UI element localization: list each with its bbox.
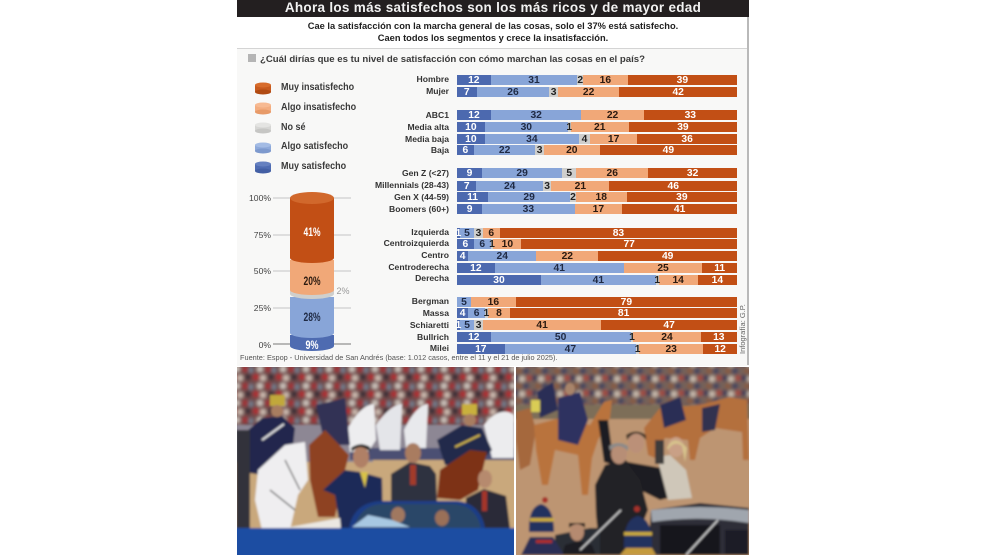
- bar: Mujer: [457, 87, 737, 98]
- bar: Izquierda: 3: [476, 228, 481, 239]
- bar: Mujer: 7: [464, 87, 470, 98]
- bar: ABC1: 32: [530, 110, 542, 121]
- bar: Mujer: 3: [551, 87, 556, 98]
- bar: ABC1: [457, 110, 737, 121]
- bar: Massa: 1: [484, 308, 489, 319]
- bar: Mujer: 26: [507, 87, 519, 98]
- bar: Centro: [457, 251, 737, 262]
- stacked cylinder chart: 2%: [336, 286, 350, 296]
- bar: Boomers: 41: [674, 204, 685, 215]
- stacked cylinder chart: 9%: [306, 338, 319, 352]
- bar: Baja: 22: [499, 145, 510, 156]
- bar: Hombre: 12: [468, 75, 480, 86]
- bar: Derecha: 14: [712, 275, 723, 286]
- bar: Izquierda: [456, 228, 737, 239]
- text: Millennials (28-43): [375, 180, 449, 190]
- bar: Massa: 8: [496, 308, 502, 319]
- bar: Milei: [457, 344, 737, 355]
- bar: Gen Z: 32: [687, 168, 698, 179]
- bar: Hombre: 39: [677, 75, 688, 86]
- bar: Massa: 81: [618, 308, 629, 319]
- bar: Media baja: 34: [526, 134, 538, 145]
- text: Massa: [423, 308, 449, 318]
- bar: Massa: 6: [474, 308, 479, 319]
- bar: Bullrich: 1: [629, 332, 635, 343]
- bar: Gen X: [457, 192, 737, 203]
- text: Algo satisfecho: [281, 141, 348, 152]
- bar: Media baja: [457, 134, 737, 145]
- text: Baja: [431, 145, 449, 155]
- stacked cylinder chart: 100%: [249, 193, 271, 203]
- stacked cylinder chart: 0%: [259, 340, 271, 350]
- bar: Milei: 17: [475, 344, 487, 355]
- bar: Millennials: [457, 181, 737, 192]
- bar: Derecha: [457, 275, 737, 286]
- bar: Schiaretti: [456, 320, 737, 331]
- bar: Derecha: 14: [672, 275, 684, 286]
- bar: Centroizquierda: 6: [479, 239, 485, 250]
- bar: Bergman: 5: [461, 297, 467, 308]
- text: ABC1: [426, 110, 449, 120]
- text: Centroizquierda: [384, 238, 449, 248]
- bar: Media alta: 39: [677, 122, 689, 133]
- bar: ABC1: 12: [468, 110, 480, 121]
- bar: Boomers: 17: [593, 204, 604, 215]
- bar: Boomers: 33: [523, 204, 534, 215]
- bar: Centro: 24: [497, 251, 508, 262]
- bar: Milei: 47: [565, 344, 576, 355]
- bar: Baja: [457, 145, 737, 156]
- bar: Centro: 4: [460, 251, 466, 262]
- bar: Media alta: 10: [465, 122, 477, 133]
- stacked cylinder chart: [249, 192, 351, 352]
- text: Gen Z (<27): [402, 168, 449, 178]
- bar: Gen Z: 9: [467, 168, 472, 179]
- text: Schiaretti: [410, 320, 449, 330]
- bar: Bullrich: [457, 332, 737, 343]
- bar: Media baja: 17: [608, 134, 619, 145]
- text: Infografía: G.P.: [738, 304, 747, 354]
- bar: Derecha: 1: [654, 275, 660, 286]
- bar: Centro: 22: [562, 251, 573, 262]
- bar: Boomers: 9: [467, 204, 472, 215]
- bar: Baja: 20: [566, 145, 578, 156]
- bar: Media alta: 21: [594, 122, 606, 133]
- bar: Mujer: 42: [672, 87, 684, 98]
- photo: parade with open car, left: [237, 367, 514, 555]
- bar: Bullrich: 24: [661, 332, 673, 343]
- text: Mujer: [426, 86, 449, 96]
- bar: Derecha: 41: [593, 275, 604, 286]
- bar: Baja: 49: [663, 145, 674, 156]
- title: Ahora los más satisfechos son los más ricos y de mayor edad: [285, 0, 701, 15]
- text: Algo insatisfecho: [281, 102, 356, 113]
- bar: Bullrich: 50: [555, 332, 566, 343]
- bar: Bergman: [457, 297, 737, 308]
- text: Boomers (60+): [389, 204, 449, 214]
- bar: Millennials: 3: [544, 181, 550, 192]
- legend icons: [255, 82, 271, 174]
- bar: Milei: 1: [635, 344, 640, 355]
- stacked cylinder chart: 25%: [254, 303, 271, 313]
- legend: [255, 82, 271, 174]
- bar: Hombre: 31: [528, 75, 540, 86]
- bar: Gen Z: 29: [516, 168, 528, 179]
- bar: Millennials: 24: [504, 181, 515, 192]
- bar: Gen Z: 5: [566, 168, 572, 179]
- text: Izquierda: [411, 227, 449, 237]
- bar: Centroizquierda: [457, 239, 737, 250]
- stacked cylinder chart: 41%: [304, 225, 321, 239]
- source note: Fuente: Espop - Universidad de San Andrés (base: 1.012 casos, entre el 11 y el 21 de julio 2025).: [240, 353, 557, 362]
- bar: Schiaretti: 1: [456, 320, 461, 331]
- text: Media baja: [405, 134, 449, 144]
- bar: Boomers: [457, 204, 737, 215]
- bar: Media baja: 10: [465, 134, 477, 145]
- bar: Derecha: 30: [493, 275, 505, 286]
- text: Bergman: [412, 296, 449, 306]
- bar: Massa: [457, 308, 737, 319]
- bar: Mujer: 22: [583, 87, 594, 98]
- text: Gen X (44-59): [394, 192, 449, 202]
- bar: Media baja: 36: [681, 134, 693, 145]
- bar: Bullrich: 13: [713, 332, 725, 343]
- text: Milei: [430, 343, 449, 353]
- bar: Schiaretti: 5: [464, 320, 470, 331]
- bar: Milei: 23: [665, 344, 677, 355]
- bar: Bullrich: 12: [468, 332, 480, 343]
- bar: Izquierda: 1: [456, 228, 461, 239]
- text: Centro: [421, 250, 449, 260]
- bar: Millennials: 7: [464, 181, 470, 192]
- bar: Media baja: 4: [582, 134, 587, 145]
- stacked cylinder chart: 75%: [254, 230, 271, 240]
- bar: Izquierda: 6: [488, 228, 494, 239]
- text: No sé: [281, 122, 306, 133]
- stacked cylinder chart: 28%: [304, 310, 321, 324]
- stacked cylinder chart: 20%: [304, 274, 321, 288]
- bar: Centroizquierda: 6: [463, 239, 468, 250]
- bar: Gen X: 39: [676, 192, 688, 203]
- text: Muy satisfecho: [281, 161, 346, 172]
- bar: ABC1: 22: [607, 110, 618, 121]
- bar: Media alta: 30: [521, 122, 532, 133]
- text: Hombre: [417, 74, 449, 84]
- bar: Hombre: [457, 75, 737, 86]
- bar: Massa: 4: [460, 308, 465, 319]
- bar: Gen X: 11: [467, 192, 478, 203]
- bar: Baja: 3: [537, 145, 542, 156]
- bar: Centroizquierda: 10: [502, 239, 513, 250]
- bar: Gen Z: 26: [606, 168, 618, 179]
- bar: Milei: 12: [714, 344, 726, 355]
- text: Derecha: [415, 273, 449, 283]
- subtitle: Cae la satisfacción con la marcha general de las cosas, solo el 37% está satisfecho.: [308, 21, 678, 31]
- text: Muy insatisfecho: [281, 82, 354, 93]
- subtitle: Caen todos los segmentos y crece la insatisfacción.: [378, 33, 608, 43]
- bar: Millennials: 21: [575, 181, 586, 192]
- bar: Centroizquierda: 1: [489, 239, 495, 250]
- bar: Schiaretti: 41: [536, 320, 548, 331]
- panel right border: [747, 12, 749, 365]
- bar: Izquierda: 83: [613, 228, 624, 239]
- bar: Hombre: 2: [577, 75, 583, 86]
- chart panel background: [237, 48, 749, 366]
- bar: Bergman: 79: [621, 297, 632, 308]
- bar: Centro: 49: [662, 251, 673, 262]
- bar: Centroizquierda: 77: [623, 239, 635, 250]
- bar: ABC1: 33: [685, 110, 696, 121]
- bar: Centroderecha: [457, 263, 737, 274]
- bar: Media alta: 1: [566, 122, 572, 133]
- bar: Schiaretti: 3: [476, 320, 482, 331]
- stacked cylinder chart: 50%: [254, 266, 271, 276]
- bar: Gen X: 2: [570, 192, 576, 203]
- bar: Izquierda: 5: [464, 228, 470, 239]
- text: Bullrich: [417, 332, 449, 342]
- bar: Gen X: 29: [523, 192, 535, 203]
- bar: Centroderecha: 25: [657, 263, 669, 274]
- bar: Bergman: 16: [488, 297, 499, 308]
- text: Media alta: [407, 122, 449, 132]
- subtitle: [308, 21, 678, 43]
- bar: Media alta: [457, 122, 737, 133]
- bar: Millennials: 46: [668, 181, 679, 192]
- photo: parade with open car, right: [516, 367, 749, 555]
- bar: Centroderecha: 11: [714, 263, 725, 274]
- bar: Baja: 6: [463, 145, 468, 156]
- bar: Centroderecha: 12: [470, 263, 482, 274]
- survey question: ¿Cuál dirías que es tu nivel de satisfacción con cómo marchan las cosas en el país?: [260, 54, 645, 65]
- bar: Hombre: 16: [600, 75, 611, 86]
- bar: Centroderecha: 41: [554, 263, 565, 274]
- bar: Gen X: 18: [596, 192, 607, 203]
- bar: Gen Z: [457, 168, 737, 179]
- text: Centroderecha: [388, 262, 449, 272]
- bar: Schiaretti: 47: [663, 320, 675, 331]
